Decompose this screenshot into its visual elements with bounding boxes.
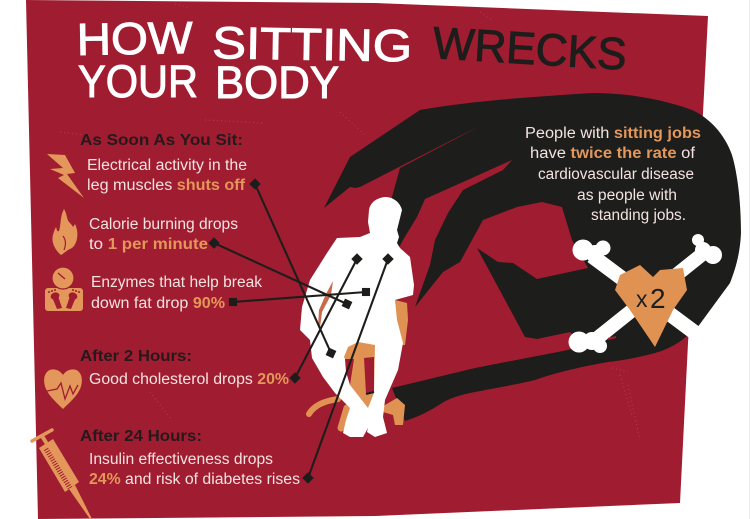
title: BODY <box>215 57 339 108</box>
black hand <box>324 93 741 421</box>
text: calorie burning: Calorie burning drops <box>89 216 238 233</box>
text: insulin: Insulin effectiveness drops <box>89 451 273 468</box>
text: electrical activity: Electrical activity in the <box>87 157 247 174</box>
caster <box>341 408 347 428</box>
title: WRECKS <box>431 17 628 80</box>
title: SITTING <box>212 17 413 71</box>
section: as soon as you sit <box>45 132 262 312</box>
callout: sitting jobs <box>525 125 701 224</box>
bone: upper left to lower right <box>572 240 702 338</box>
text: enzymes: down fat drop 90% <box>91 295 225 312</box>
text: cholesterol: Good cholesterol drops 20% <box>89 371 289 388</box>
text: enzymes <box>91 274 262 312</box>
icon: heart with pulse <box>44 369 82 409</box>
callout: sitting jobs: as people with <box>577 187 677 204</box>
callout: sitting jobs: People with sitting jobs <box>525 125 701 142</box>
chair between legs <box>344 342 375 408</box>
heading: After 24 Hours: <box>80 428 202 445</box>
red fleck <box>608 337 616 339</box>
section: after 24 hours <box>32 428 300 519</box>
line: 20% <box>291 255 361 382</box>
text: enzymes: Enzymes that help break <box>91 274 262 291</box>
heart badge x2 <box>615 265 687 347</box>
line: rises <box>304 255 392 482</box>
office chair <box>309 300 408 428</box>
heading: As Soon As You Sit: <box>80 132 243 149</box>
line: shuts off <box>251 180 335 357</box>
right base arm <box>380 398 405 425</box>
text: electrical activity: leg muscles shuts off <box>87 177 246 194</box>
icon: syringe <box>32 430 92 519</box>
section: after 2 hours <box>44 348 289 409</box>
page edge <box>749 0 750 519</box>
text: insulin: 24% and risk of diabetes rises <box>89 471 300 488</box>
heart badge x2: 2 <box>650 283 666 314</box>
callout: sitting jobs: have twice the rate of <box>530 145 696 162</box>
heart badge x2: x <box>636 286 648 312</box>
text: calorie burning: to 1 per minute <box>89 236 208 253</box>
heading: After 2 Hours: <box>80 348 192 365</box>
title: HOW <box>76 12 194 65</box>
title <box>76 12 628 108</box>
chair back <box>395 300 408 345</box>
crossbones <box>568 234 722 353</box>
grain texture <box>60 4 640 440</box>
arm sliver <box>318 281 333 328</box>
callout: sitting jobs: standing jobs. <box>591 207 686 224</box>
text: calorie burning <box>89 216 238 253</box>
text: electrical activity <box>87 157 247 194</box>
icon: flame <box>52 209 77 255</box>
line: 90% <box>230 289 369 305</box>
seated man silhouette <box>300 197 414 437</box>
left base arm <box>309 399 338 414</box>
connector lines <box>210 180 392 482</box>
title: YOUR <box>78 56 198 107</box>
icon: lightning bolt <box>47 154 84 198</box>
text: insulin <box>89 451 300 488</box>
callout: sitting jobs: cardiovascular disease <box>538 166 694 183</box>
icon: scale with footprints <box>45 267 83 311</box>
bone: lower left to upper right <box>568 234 722 353</box>
line: per minute <box>210 239 351 308</box>
